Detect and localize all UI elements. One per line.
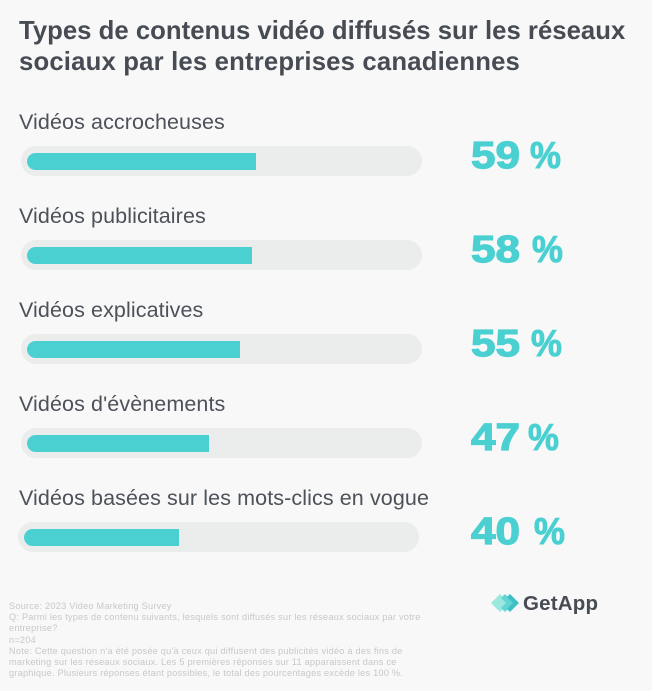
bar fill 2: [27, 246, 252, 264]
footnote: marketing sur les réseaux sociaux. Les 5 premières réponses sur 11 apparaissent dans ce: [9, 657, 397, 667]
value 59 %: %: [530, 135, 561, 176]
label: vidéos basées sur les mots-clics: Vidéos basées sur les mots-clics en vogue: [19, 486, 429, 510]
panel: row 5: [18, 486, 564, 553]
logo: GetApp: [491, 592, 598, 615]
value 40 %: 40: [471, 511, 520, 553]
value 47 %: 47: [471, 417, 520, 459]
value 55 %: 55: [471, 323, 520, 365]
panel: row 2: [19, 204, 562, 271]
title: [19, 17, 625, 76]
bar track 3: [21, 334, 422, 364]
value 58 %: 58: [471, 229, 520, 271]
bar track 4: [21, 428, 422, 458]
bar track 5: [18, 522, 419, 552]
footnote: Q: Parmi les types de contenu suivants, lesquels sont diffusés sur les réseaux sociaux par votre: [9, 612, 421, 622]
value 40 %: %: [534, 511, 564, 552]
panel: row 3: [19, 298, 562, 365]
bar track 1: [21, 146, 422, 176]
value 40 %: [470, 511, 564, 553]
value 55 %: [471, 323, 562, 365]
label: vidéos accrocheuses: Vidéos accrocheuses: [19, 110, 225, 134]
footnote: Source: 2023 Video Marketing Survey: [9, 601, 172, 611]
logo wordmark: GetApp: [523, 592, 598, 615]
value 58 %: %: [532, 229, 562, 270]
icon: GetApp chevrons: [491, 594, 519, 612]
footnote: entreprise?: [9, 623, 58, 633]
footnote: [9, 601, 421, 678]
label: vidéos publicitaires: Vidéos publicitaires: [19, 204, 206, 228]
value 47 %: %: [528, 417, 558, 458]
title: sociaux par les entreprises canadiennes: [19, 48, 520, 76]
label: vidéos explicatives: Vidéos explicatives: [19, 298, 203, 322]
value 58 %: [471, 229, 562, 271]
title: Types de contenus vidéo diffusés sur les réseaux: [19, 17, 625, 45]
bar fill 1: [27, 152, 256, 170]
value 55 %: %: [530, 323, 561, 364]
footnote: graphique. Plusieurs réponses étant possibles, le total des pourcentages excède les 100 %.: [9, 668, 403, 678]
bar fill 4: [27, 434, 209, 452]
footnote: n=204: [9, 635, 36, 645]
value 59 %: 59: [471, 135, 520, 177]
panel: row 1: [19, 110, 561, 177]
bar fill 3: [27, 340, 240, 358]
value 47 %: [470, 417, 558, 459]
value 59 %: [471, 135, 561, 177]
bar fill 5: [24, 528, 179, 546]
label: vidéos d'évènements: Vidéos d'évènements: [19, 392, 225, 416]
footnote: Note: Cette question n'a été posée qu'à ceux qui diffusent des publicités vidéo à des fins de: [9, 646, 402, 656]
panel: row 4: [19, 392, 558, 459]
bar track 2: [21, 240, 422, 270]
